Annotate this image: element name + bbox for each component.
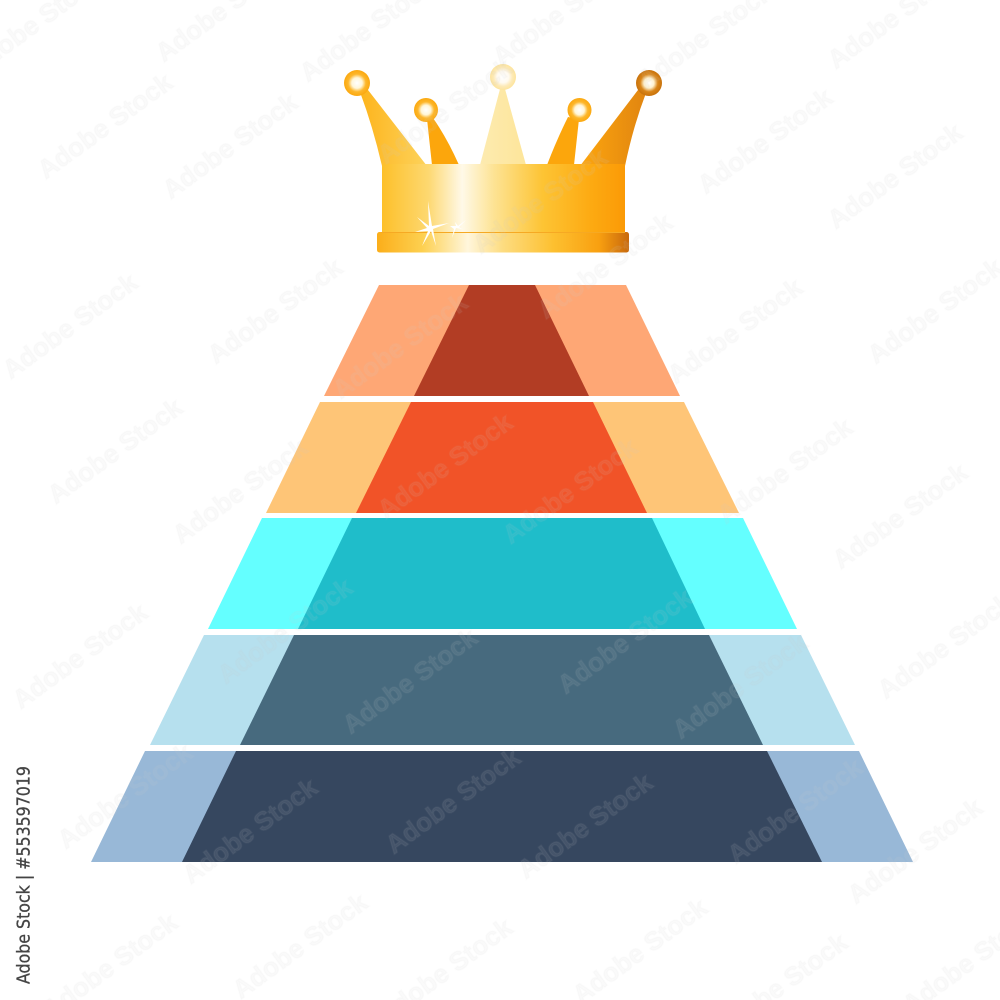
tier 5 side panels (91, 751, 913, 862)
crown body (382, 164, 625, 233)
stock watermarks: Adobe Stock (372, 52, 518, 170)
crown ball: centre (490, 64, 516, 90)
stock watermarks: Adobe Stock (32, 67, 178, 185)
tier 4 centre panel (240, 635, 763, 745)
tier 2 (266, 402, 739, 513)
stock watermarks: Adobe Stock (692, 82, 838, 200)
stock watermarks: Adobe Stock (157, 87, 303, 205)
tier 4 side panels (150, 635, 855, 745)
stock watermarks: Adobe Stock (337, 622, 483, 740)
tier 1 side panels (324, 285, 680, 396)
stock watermarks: Adobe Stock (52, 737, 198, 855)
tier 3 centre panel (298, 518, 705, 629)
stock watermarks: Adobe Stock (722, 752, 868, 870)
stock watermarks: Adobe Stock (167, 432, 313, 550)
tier 1 (324, 285, 680, 396)
crown spike: inner right (547, 117, 579, 165)
crown (344, 64, 662, 252)
stock watermarks: Adobe Stock (667, 627, 813, 745)
crown band edge (381, 232, 625, 233)
tier 3 side panels (208, 518, 797, 629)
stock watermarks: Adobe Stock (7, 597, 153, 715)
stock watermarks: Adobe Stock (552, 582, 698, 700)
stock watermarks: Adobe Stock (497, 432, 643, 550)
stock watermarks: Adobe Stock (467, 142, 613, 260)
crown spike: far left (360, 90, 427, 166)
pyramid (91, 285, 913, 862)
tier 4 (150, 635, 855, 745)
sparkle: small (450, 220, 466, 238)
stock watermarks: Adobe Stock (380, 742, 526, 860)
tier 5 (91, 751, 913, 862)
stock watermarks: Adobe Stock (532, 207, 678, 325)
crown ball: far left (344, 70, 370, 96)
stock watermarks: Adobe Stock (842, 792, 988, 910)
stock watermarks: Adobe Stock (212, 572, 358, 690)
crown spike: centre (480, 89, 526, 165)
stock watermarks: Adobe Stock (0, 267, 143, 385)
tier 5 centre panel (182, 751, 822, 862)
stock watermarks: Adobe Stock (327, 287, 473, 405)
crown ball: inner right (568, 98, 592, 122)
stock watermarks: Adobe Stock (822, 117, 968, 235)
stock watermarks: Adobe Stock (177, 772, 323, 890)
stock id label: Adobe Stock | #553597019 (14, 766, 34, 984)
crown ball: far right (636, 70, 662, 96)
stock watermarks: Adobe Stock (42, 392, 188, 510)
stock watermarks: Adobe Stock (202, 252, 348, 370)
stock watermarks: Adobe Stock (827, 457, 973, 575)
stock watermarks: Adobe Stock (662, 272, 808, 390)
crown band (377, 232, 629, 252)
tier 2 centre panel (356, 402, 647, 513)
crown ball: inner left (414, 98, 438, 122)
crown spike: far right (580, 90, 646, 166)
stock watermarks: Adobe Stock (712, 412, 858, 530)
tier 3 (208, 518, 797, 629)
crown spike: inner left (427, 118, 459, 165)
tier 1 centre panel (414, 285, 589, 396)
stock watermarks: Adobe Stock (372, 407, 518, 525)
sparkle: large (415, 201, 449, 246)
stock watermarks: Adobe Stock (512, 767, 658, 885)
tier 2 side panels (266, 402, 739, 513)
